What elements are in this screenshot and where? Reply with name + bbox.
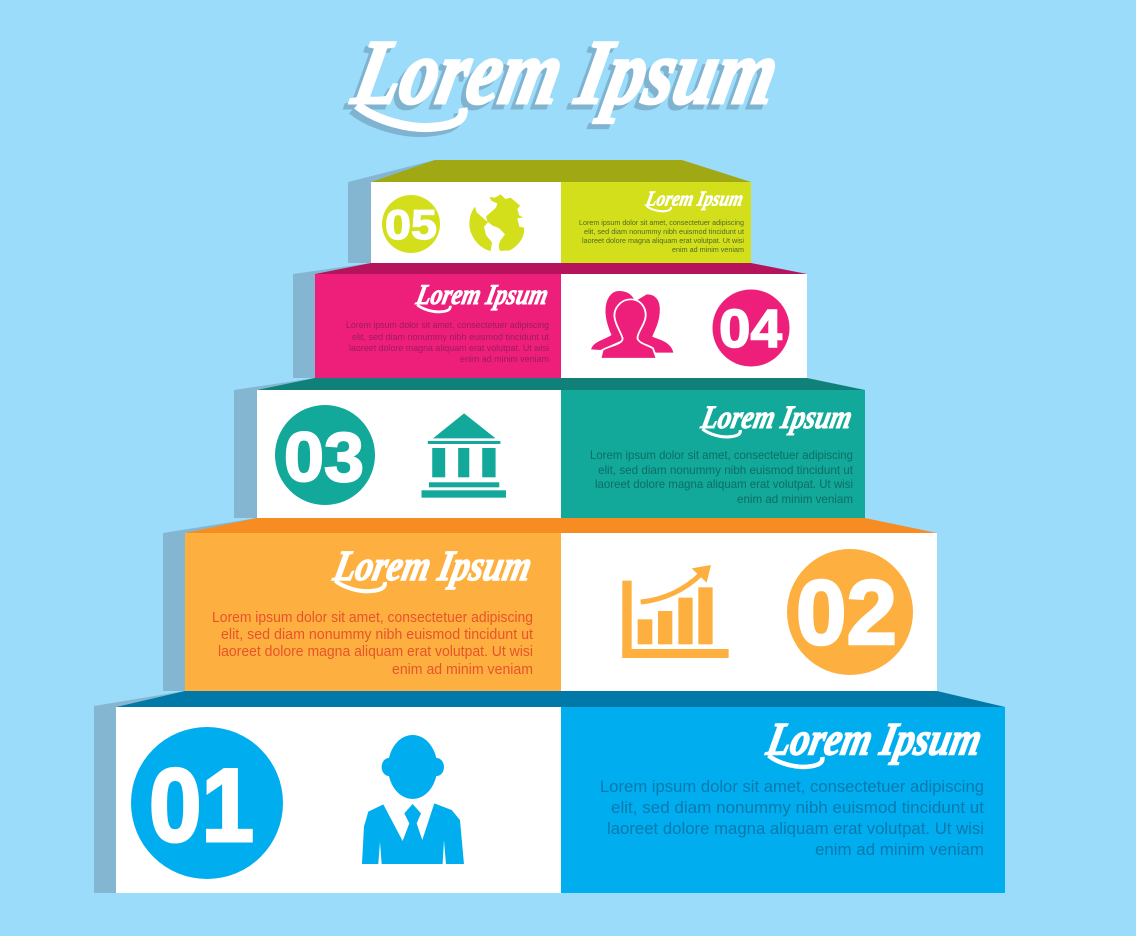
- title: Lorem Ipsum: [345, 22, 787, 124]
- body text: elit, sed diam nonummy nibh euismod tincidunt ut: [584, 227, 744, 236]
- tier 4 top face: [315, 263, 807, 274]
- tier 3 coloured panel: [561, 390, 865, 518]
- tier 2 shadow: [163, 518, 257, 691]
- tier 2 white panel: [561, 533, 937, 691]
- body text: Lorem ipsum dolor sit amet, consectetuer adipiscing: [590, 448, 853, 462]
- body text: laoreet dolore magna aliquam erat volutpat. Ut wisi: [607, 819, 984, 838]
- body text: elit, sed diam nonummy nibh euismod tincidunt ut: [611, 798, 984, 817]
- body text: laoreet dolore magna aliquam erat volutpat. Ut wisi: [349, 342, 549, 353]
- body text: [212, 610, 533, 678]
- icon: bank: [421, 413, 506, 498]
- body text: enim ad minim veniam: [672, 245, 744, 254]
- tier 1 coloured panel: [561, 707, 1005, 893]
- heading: Lorem Ipsum: [329, 542, 536, 590]
- number badge 03: 03: [284, 418, 364, 496]
- tier 2 coloured panel: [185, 533, 561, 691]
- number badge 05: 05: [385, 201, 437, 248]
- tier 4 white panel: [561, 274, 807, 378]
- tier 5 white panel: [371, 182, 561, 263]
- title: Lorem Ipsum: [340, 27, 782, 129]
- body text: laoreet dolore magna aliquam erat volutpat. Ut wisi: [218, 644, 533, 660]
- body text: [590, 448, 854, 506]
- body text: enim ad minim veniam: [737, 492, 853, 506]
- heading: Lorem Ipsum: [643, 187, 746, 211]
- tier 4 shadow: [293, 263, 371, 378]
- tier 4 coloured panel: [315, 274, 561, 378]
- icon: rising bar chart: [622, 565, 729, 658]
- tier 3 white panel: [257, 390, 561, 518]
- icon: people: [591, 291, 673, 359]
- body text: enim ad minim veniam: [815, 840, 984, 859]
- heading: Lorem Ipsum: [762, 714, 987, 765]
- body text: [579, 218, 744, 254]
- number badge 02: 02: [796, 562, 897, 664]
- body text: [346, 319, 549, 364]
- body text: enim ad minim veniam: [392, 662, 533, 678]
- tier 1 white panel: [116, 707, 561, 893]
- tier 2: chart: [185, 518, 937, 691]
- tier 5 top face: [371, 160, 751, 182]
- tier 5 shadow: [348, 160, 435, 263]
- icon: businessman: [362, 735, 464, 864]
- tier 3: bank: [257, 378, 865, 518]
- number badge 05: [382, 195, 440, 253]
- body text: Lorem ipsum dolor sit amet, consectetuer adipiscing: [346, 319, 549, 330]
- heading: Lorem Ipsum: [698, 400, 856, 436]
- number badge 04: 04: [719, 299, 782, 359]
- tier 3 top face: [257, 378, 865, 390]
- tier 2 top face: [185, 518, 937, 533]
- number badge 02: [787, 549, 913, 675]
- heading: Lorem Ipsum: [413, 279, 551, 311]
- body text: Lorem ipsum dolor sit amet, consectetuer adipiscing: [600, 777, 984, 796]
- body text: elit, sed diam nonummy nibh euismod tincidunt ut: [221, 627, 533, 643]
- number badge 01: 01: [149, 748, 254, 864]
- body text: laoreet dolore magna aliquam erat volutpat. Ut wisi: [595, 477, 853, 491]
- body text: Lorem ipsum dolor sit amet, consectetuer adipiscing: [579, 218, 744, 227]
- body text: elit, sed diam nonummy nibh euismod tincidunt ut: [598, 463, 854, 477]
- tier 3 shadow: [234, 378, 315, 518]
- body text: [600, 777, 984, 859]
- tier 5 coloured panel: [561, 182, 751, 263]
- tier 1: businessman: [116, 691, 1005, 893]
- body text: laoreet dolore magna aliquam erat volutpat. Ut wisi: [582, 236, 744, 245]
- body text: Lorem ipsum dolor sit amet, consectetuer adipiscing: [212, 610, 533, 626]
- number badge 01: [131, 727, 283, 879]
- tier 4: people: [315, 263, 807, 378]
- number badge 04: [712, 290, 790, 366]
- number badge 03: [275, 405, 375, 505]
- tier 1 top face: [116, 691, 1005, 707]
- tier 1 shadow: [94, 691, 185, 893]
- tier 5: globe: [371, 160, 751, 263]
- body text: elit, sed diam nonummy nibh euismod tincidunt ut: [352, 331, 549, 342]
- body text: enim ad minim veniam: [460, 353, 549, 364]
- icon: globe: [469, 194, 524, 251]
